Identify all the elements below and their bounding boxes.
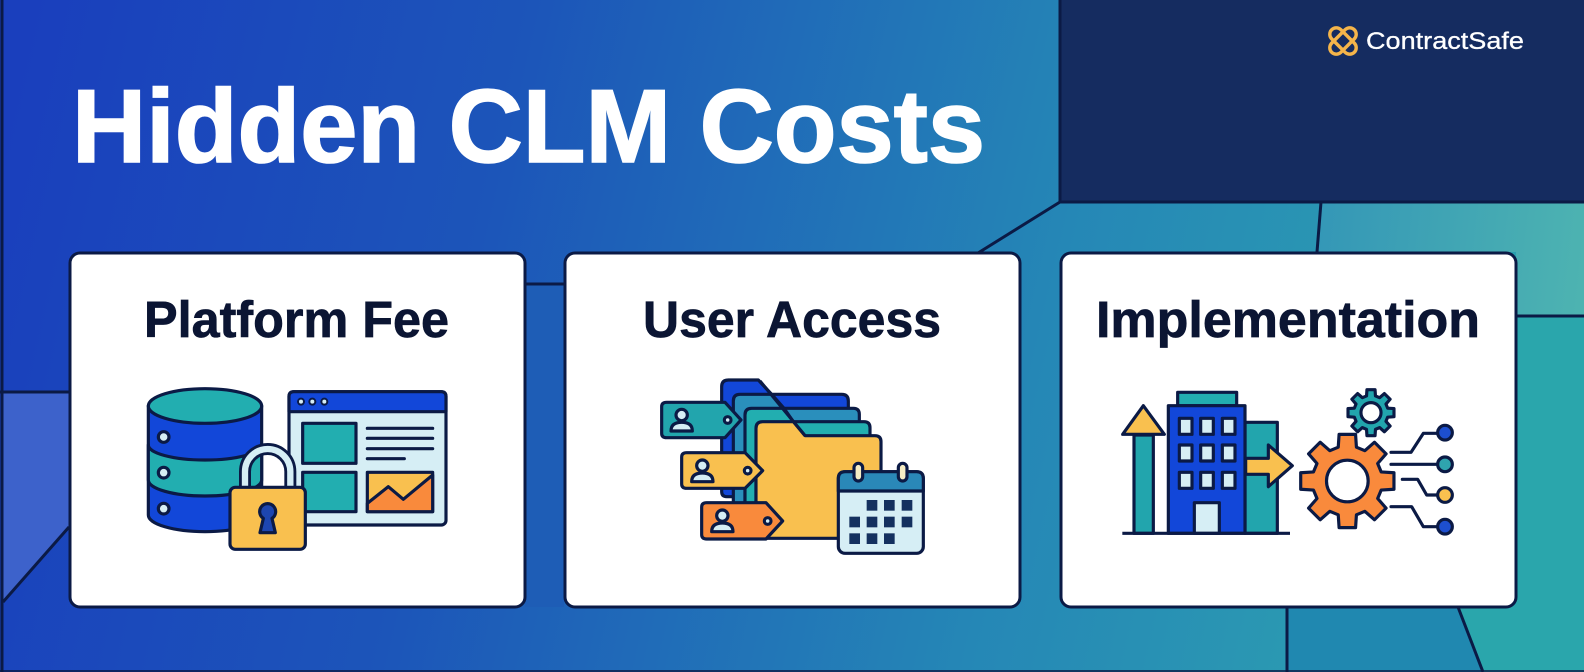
icon: up arrow [1123, 406, 1164, 533]
icon: logo mark [1327, 25, 1359, 57]
icon: dashboard window [289, 392, 446, 525]
panel: Platform Fee [70, 253, 525, 607]
icon: yellow user tag [682, 453, 763, 488]
heading: Platform Fee: Platform Fee [144, 291, 449, 348]
icon: office building [1122, 392, 1290, 533]
icon: stacked folders [722, 380, 881, 538]
icon: building, gears and connectors [1122, 390, 1452, 534]
title: Hidden CLM Costs [72, 69, 985, 185]
icon: folders, user tags and calendar [662, 380, 923, 553]
logo: ContractSafe [1327, 25, 1524, 57]
logo wordmark: ContractSafe [1366, 28, 1524, 55]
icon: teal user tag [662, 402, 741, 438]
icon: small teal gear [1348, 390, 1394, 436]
icon: circuit connectors [1391, 425, 1452, 534]
icon: right arrow [1246, 445, 1292, 487]
heading: Implementation: Implementation [1096, 291, 1480, 348]
panel: User Access [565, 253, 1020, 607]
heading: User Access: User Access [643, 291, 941, 348]
panel: dark logo corner [1060, 0, 1584, 202]
icon: database, lock and dashboard window [148, 389, 446, 549]
panel: Implementation [1061, 253, 1516, 607]
icon: database [148, 389, 262, 532]
icon: calendar [838, 463, 923, 553]
icon: padlock [230, 449, 305, 549]
icon: large orange gear [1301, 434, 1394, 528]
icon: orange user tag [702, 503, 783, 539]
